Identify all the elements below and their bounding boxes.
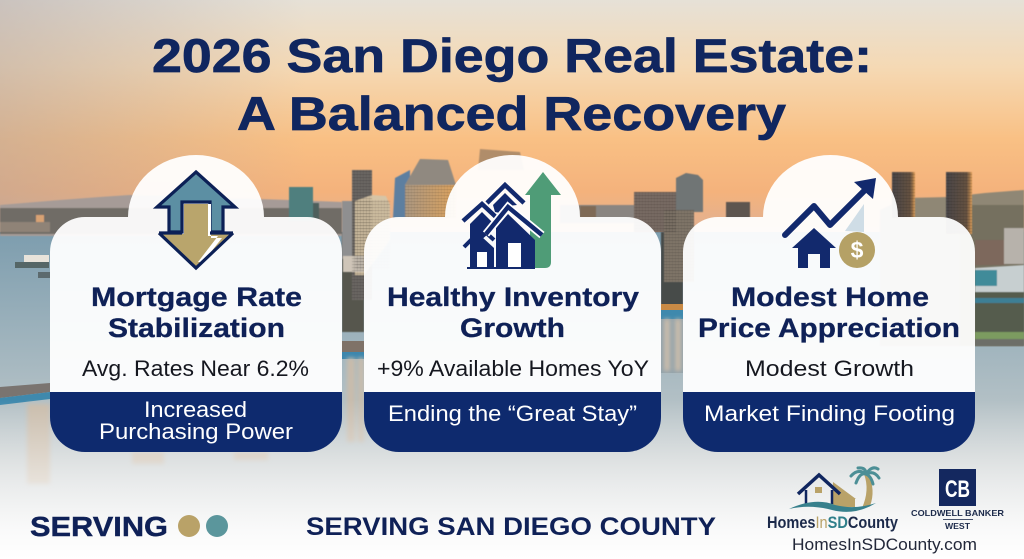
icon: rising price line, house and dollar coin: $ (851, 237, 864, 263)
band text: increased purchasing power: Purchasing Power (99, 419, 293, 444)
heading: mortgage rate stabilization (91, 282, 302, 343)
logo: Coldwell Banker West (911, 469, 1004, 531)
band text: ending the great stay: Ending the “Great Stay” (388, 401, 637, 426)
title: A Balanced Recovery (237, 87, 786, 140)
panel: modest home price appreciation (683, 155, 975, 452)
background: white fade at bottom (0, 400, 1024, 559)
background: bay water (0, 232, 1024, 559)
band text: increased purchasing power (99, 397, 293, 444)
background: harbor ferry (15, 255, 50, 278)
logo: HomesInSDCounty (767, 468, 899, 532)
heading: healthy inventory growth: Healthy Inventory (387, 282, 639, 312)
icon: rising price line, house and dollar coin (785, 178, 876, 268)
heading: modest home price appreciation: Modest Home (731, 282, 929, 312)
heading: modest home price appreciation: Price Appreciation (698, 313, 960, 343)
stat: available homes: +9% Available Homes YoY (377, 356, 649, 381)
panel: healthy inventory growth (364, 155, 661, 452)
background: sunset sky (0, 0, 1024, 240)
background: downtown skyline (289, 149, 1024, 346)
stat: average rates: Avg. Rates Near 6.2% (82, 356, 309, 381)
heading: mortgage rate stabilization: Stabilization (108, 313, 285, 343)
panel: mortgage rate stabilization (50, 155, 342, 452)
logo: Coldwell Banker West: COLDWELL BANKER (911, 508, 1004, 518)
logo: HomesInSDCounty: HomesInSDCounty (767, 514, 899, 532)
footer: serving label with dots (30, 511, 228, 542)
heading: healthy inventory growth (387, 282, 639, 343)
heading: modest home price appreciation (698, 282, 960, 343)
footer: serving san diego county: SERVING SAN DIEGO COUNTY (306, 513, 716, 541)
band text: increased purchasing power: Increased (144, 397, 247, 422)
background: distant hills and shoreline (0, 190, 1024, 346)
title (152, 29, 872, 140)
logo: Coldwell Banker West: CB (945, 476, 970, 503)
icon: houses with growth arrow (463, 172, 561, 269)
logo: Coldwell Banker West: WEST (945, 521, 971, 531)
heading: healthy inventory growth: Growth (460, 313, 565, 343)
heading: mortgage rate stabilization: Mortgage Rate (91, 282, 302, 312)
title: 2026 San Diego Real Estate: (152, 29, 872, 82)
footer: serving label with dots: SERVING (30, 511, 168, 542)
band text: market finding footing: Market Finding Footing (704, 401, 955, 426)
icon: up and down mortgage arrows (157, 172, 235, 268)
website address: HomesInSDCounty.com (792, 535, 977, 554)
stat: modest growth: Modest Growth (745, 356, 914, 381)
background: Coronado bridge (0, 304, 683, 484)
